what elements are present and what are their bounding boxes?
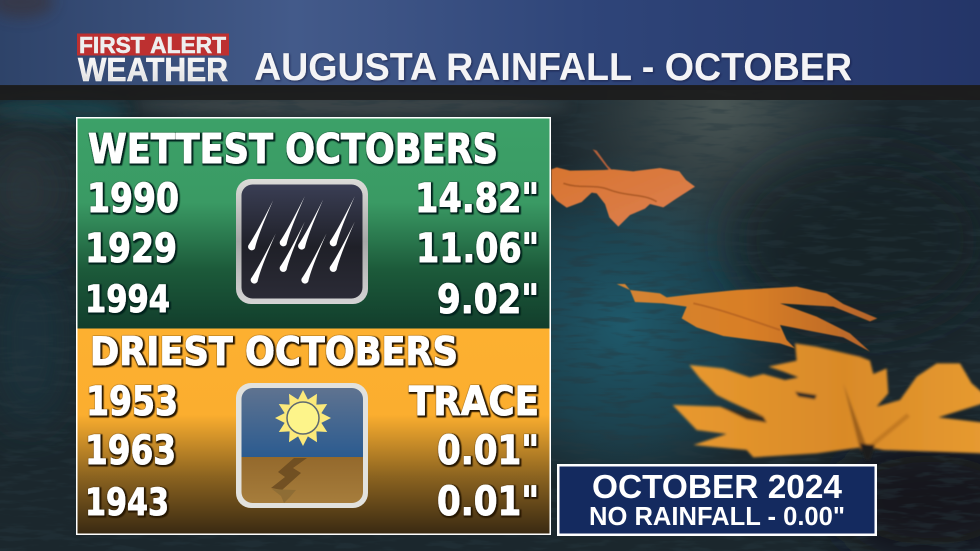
row: 1953: 1953: [86, 379, 178, 425]
logo: First Alert Weather: FIRST ALERT: [79, 32, 226, 58]
row: 1963: 0.01": [437, 428, 539, 474]
row: 1953: TRACE: [409, 379, 539, 425]
callout: October 2024: NO RAINFALL - 0.00": [589, 501, 845, 531]
panel: wettest Octobers: [78, 118, 550, 328]
row: 1994: 1994: [85, 278, 170, 321]
heading: driest: DRIEST OCTOBERS: [90, 330, 458, 375]
callout: October 2024: OCTOBER 2024: [592, 468, 843, 505]
heading: wettest: WETTEST OCTOBERS: [88, 125, 498, 173]
title band: [0, 0, 980, 100]
logo: First Alert Weather: [77, 32, 229, 88]
row: 1963: 1963: [85, 428, 176, 474]
row: 1953: [86, 379, 539, 425]
row: 1994: [85, 277, 539, 323]
icon: heavy rain: [236, 179, 368, 304]
row: 1990: [87, 176, 539, 222]
photo: orange autumn leaves: [551, 149, 980, 460]
title: AUGUSTA RAINFALL - OCTOBER: [254, 46, 852, 89]
panel: table frame: [76, 117, 551, 535]
logo: First Alert Weather: WEATHER: [78, 51, 228, 88]
row: 1929: [85, 226, 539, 272]
row: 1943: [85, 479, 539, 525]
icon: sun and cracked ground: [236, 383, 368, 508]
row: 1943: 0.01": [437, 479, 539, 525]
row: 1990: 1990: [87, 176, 179, 222]
row: 1994: 9.02": [437, 277, 539, 323]
row: 1990: 14.82": [415, 176, 539, 222]
leaf: middle: [617, 284, 877, 352]
panel: driest Octobers: [78, 328, 550, 534]
row: 1929: 1929: [85, 226, 177, 272]
callout: October 2024: [558, 465, 876, 535]
row: 1963: [85, 428, 539, 474]
leaf: top: [551, 149, 695, 227]
row: 1929: 11.06": [416, 226, 539, 272]
leaf: bottom: [673, 343, 980, 460]
row: 1943: 1943: [85, 481, 169, 524]
